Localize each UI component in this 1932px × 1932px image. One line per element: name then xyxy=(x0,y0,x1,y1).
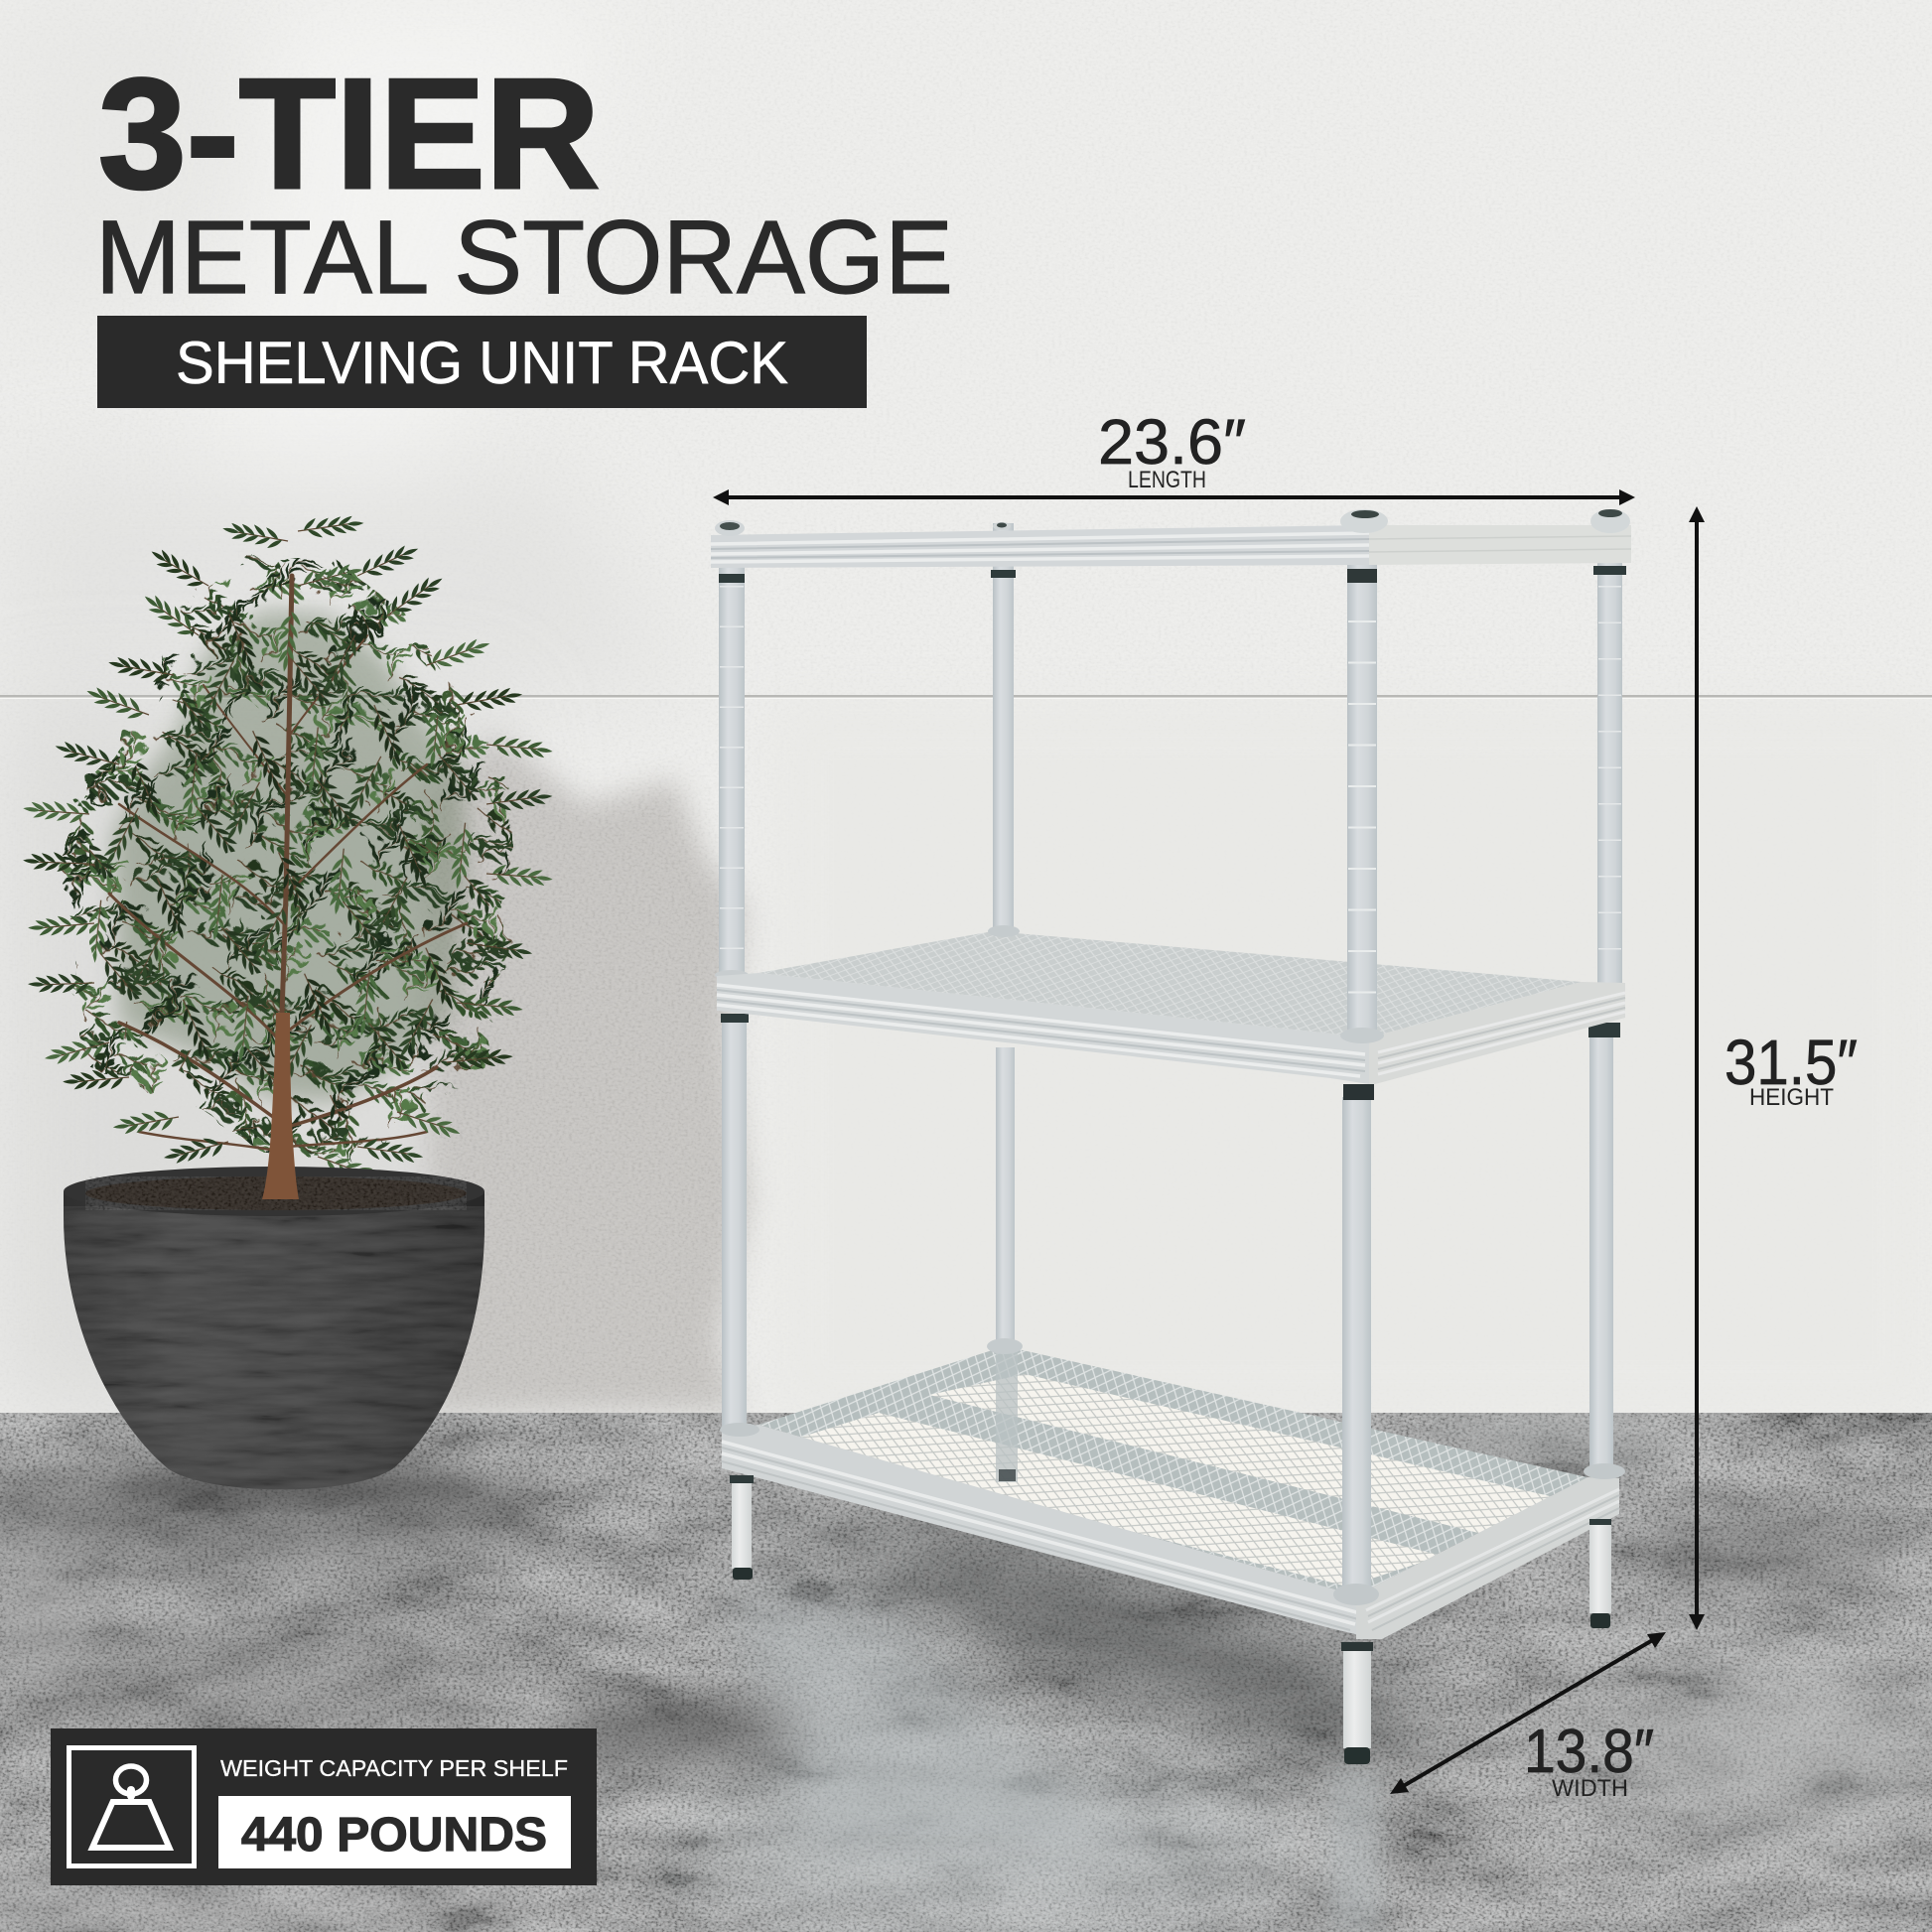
plant foliage and branches xyxy=(22,510,554,1190)
length value: 23.6″ xyxy=(1098,406,1246,478)
width value: 13.8″ xyxy=(1524,1718,1654,1786)
right post xyxy=(1584,531,1625,1479)
bottom shelf mesh xyxy=(759,1346,1587,1595)
height value: 31.5″ xyxy=(1725,1027,1858,1098)
concrete floor xyxy=(0,1412,1932,1932)
length dimension xyxy=(713,406,1635,505)
pot shadow on floor xyxy=(109,1473,486,1501)
subtitle banner: SHELVING UNIT RACK xyxy=(176,330,788,396)
front post xyxy=(1333,526,1384,1605)
middle shelf mesh xyxy=(759,931,1582,1037)
height dimension xyxy=(1689,506,1858,1630)
middle shelf side rail xyxy=(1369,982,1625,1084)
outer leaf sprays xyxy=(22,510,554,1190)
arrow: width xyxy=(1390,1632,1666,1794)
legs xyxy=(730,1475,1611,1764)
weight capacity label: WEIGHT CAPACITY PER SHELF xyxy=(220,1755,568,1781)
top collars and caps xyxy=(715,509,1630,583)
plant shadow on wall xyxy=(417,731,759,1413)
bottom shelf front rail xyxy=(722,1425,1376,1639)
middle shelf xyxy=(717,925,1625,1084)
subtitle banner xyxy=(97,316,867,408)
arrow: height xyxy=(1689,506,1705,1630)
middle shelf front rail xyxy=(717,973,1369,1084)
icon: weight xyxy=(69,1747,195,1866)
arrow: length xyxy=(713,489,1635,505)
height label: HEIGHT xyxy=(1749,1084,1834,1111)
top shelf xyxy=(711,509,1631,583)
weight capacity panel xyxy=(51,1728,597,1885)
rack shadow on floor xyxy=(743,1489,1442,1767)
weight value box: 440 POUNDS xyxy=(241,1809,547,1862)
potted plant xyxy=(22,510,554,1501)
width dimension xyxy=(1390,1632,1666,1802)
back post xyxy=(991,522,1016,1345)
title xyxy=(95,47,953,316)
top shelf side rail xyxy=(1369,525,1631,565)
tree trunk xyxy=(262,1013,299,1199)
bottom shelf side rail xyxy=(1356,1477,1619,1639)
weight value box xyxy=(218,1796,571,1868)
flower pot xyxy=(60,1167,491,1499)
left post xyxy=(715,536,759,1437)
wall background xyxy=(0,0,1932,1440)
title line: METAL STORAGE: METAL STORAGE xyxy=(95,200,953,316)
width label: WIDTH xyxy=(1552,1775,1628,1802)
top shelf front rail xyxy=(711,525,1369,568)
branches xyxy=(109,576,467,1181)
shelving rack xyxy=(711,509,1631,1767)
bottom shelf xyxy=(722,1338,1619,1639)
length label: LENGTH xyxy=(1128,467,1206,493)
title line: 3-TIER: 3-TIER xyxy=(98,47,600,221)
